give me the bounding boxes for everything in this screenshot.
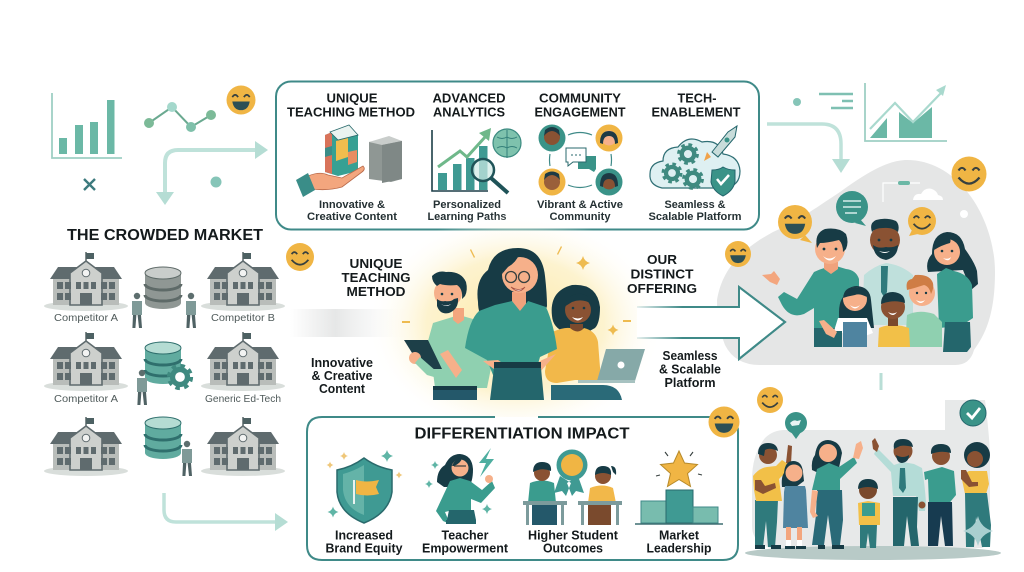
- impact: teacher empowerment: Empowerment: [422, 540, 509, 556]
- icon: teacher with lightning: [425, 448, 495, 524]
- label: generic ed-tech: Generic Ed-Tech: [205, 394, 281, 405]
- ground shadow: [745, 546, 1001, 560]
- impact: student outcomes: Higher Student: [528, 528, 619, 542]
- text: unique teaching method: TEACHING: [342, 270, 410, 285]
- figure: ginger boy: [905, 275, 942, 347]
- competitor school row 1 left: [44, 252, 128, 311]
- figure: man gesturing: [762, 229, 859, 347]
- icon: growth chart with magnifier and brain: [432, 128, 521, 193]
- label: competitor A second: Competitor A: [54, 394, 118, 405]
- icon: gray database with people: [132, 267, 196, 328]
- icon: cloud with gears, rocket and shield: [650, 126, 740, 196]
- pillar: tech-enablement: Scalable Platform: [648, 211, 742, 223]
- background: gray right blob: [717, 160, 995, 365]
- icon: teal location bubble: [785, 412, 807, 439]
- pillar: advanced analytics: Learning Paths: [428, 211, 506, 223]
- figure: central teacher: [465, 248, 557, 400]
- figure: girl in overalls: [819, 286, 874, 347]
- illustration: central team of three: [402, 246, 645, 400]
- icon: bar chart top left: [52, 93, 122, 158]
- icon: top right smile: [952, 156, 986, 192]
- pillar: unique teaching method: Innovative &: [319, 199, 385, 211]
- figure: boy raising hand: [753, 443, 792, 549]
- impact: student outcomes: [523, 450, 622, 556]
- decorative gray band: [290, 309, 420, 337]
- figure: woman teal shirt: [927, 232, 978, 352]
- label: competitor A: Competitor A: [54, 313, 118, 324]
- arrow: distinct offering big arrow: [637, 287, 785, 359]
- icon: laughing speech bubble: [778, 205, 812, 243]
- heading: the crowded market: THE CROWDED MARKET: [67, 227, 263, 244]
- competitor school row 1 right: [201, 252, 285, 311]
- pillar: community engagement: [534, 90, 626, 223]
- icon: x mark: [84, 179, 95, 190]
- figure: girl in blue dress: [782, 461, 808, 549]
- connector: vertical bar: [880, 373, 882, 390]
- impact: student outcomes: Outcomes: [543, 540, 603, 556]
- arrow: curved down to audience: [767, 124, 850, 173]
- heading: differentiation impact: DIFFERENTIATION IMPACT: [414, 426, 630, 442]
- arrow: branching market arrow: [156, 141, 268, 205]
- figure: man with tie: [862, 219, 913, 325]
- pillar: advanced analytics: ANALYTICS: [433, 104, 505, 120]
- figure: man teal shirt: [924, 444, 956, 546]
- icon: teal database with gear: [137, 342, 191, 405]
- impact: brand equity: Increased: [335, 528, 393, 542]
- impact: market leadership: [635, 451, 723, 556]
- impact: teacher empowerment: Teacher: [442, 528, 488, 542]
- icon: top right dot and lines: [793, 94, 853, 108]
- impact: brand equity: Brand Equity: [326, 540, 403, 556]
- icon: community circle with chat: [538, 124, 622, 196]
- pillar: community engagement: Community: [550, 211, 611, 223]
- text: innovative and creative content: & Creative: [312, 369, 373, 383]
- text: seamless and scalable platform: Platform: [664, 376, 716, 390]
- text: unique teaching method: [342, 256, 410, 299]
- pillar: unique teaching method: Creative Content: [307, 211, 397, 223]
- text: unique teaching method: UNIQUE: [350, 256, 403, 271]
- text: our distinct offering: OFFERING: [627, 281, 697, 296]
- impact: market leadership: Market: [659, 528, 700, 542]
- background glow behind team: [367, 213, 663, 437]
- figure: dark boy yellow shirt: [878, 292, 910, 347]
- text: seamless and scalable platform: [659, 349, 721, 390]
- icon: smiling emoji top left: [226, 86, 256, 114]
- figure: woman high five: [810, 440, 863, 549]
- pillar: unique teaching method: TEACHING METHOD: [287, 104, 415, 120]
- text: seamless and scalable platform: Seamless: [662, 349, 718, 363]
- icon: hand holding books: [296, 125, 402, 197]
- pillar: advanced analytics: [428, 90, 521, 223]
- icon: star on podium: [635, 451, 723, 524]
- pillar: tech-enablement: ENABLEMENT: [652, 104, 741, 120]
- pillar: unique teaching method: [287, 90, 415, 223]
- text: our distinct offering: OUR: [647, 252, 678, 267]
- figure: woman clapping: [961, 442, 993, 547]
- icon: students with medal: [523, 450, 622, 525]
- pillar: advanced analytics: Personalized: [433, 199, 501, 211]
- illustration: celebrating crowd: [753, 438, 993, 549]
- text: innovative and creative content: Content: [319, 382, 366, 396]
- pillar: tech-enablement: Seamless &: [664, 199, 726, 211]
- pillar: tech-enablement: TECH-: [678, 90, 716, 106]
- icon: top right growth chart: [865, 83, 947, 141]
- panel: differentiation impact: [307, 406, 740, 560]
- figure: man with tie high five: [872, 438, 926, 546]
- icon: smiling speech bubble: [908, 207, 936, 236]
- pillar: community engagement: Vibrant & Active: [537, 199, 623, 211]
- text: our distinct offering: [627, 252, 697, 296]
- pillar: unique teaching method: UNIQUE: [326, 90, 378, 106]
- icon: line nodes: [144, 102, 216, 132]
- icon: laughing emoji on arrow: [725, 241, 751, 267]
- panel: four pillars: [276, 82, 759, 230]
- text: innovative and creative content: [311, 356, 373, 396]
- pillar: tech-enablement: [648, 90, 742, 223]
- icon: laughing emoji panel corner: [708, 406, 740, 438]
- icon: teal database with person: [145, 417, 192, 476]
- panel: competitor grid: [44, 252, 285, 476]
- background: bottom right blob: [752, 400, 990, 548]
- competitor school row 2 left: [44, 332, 128, 391]
- text: our distinct offering: DISTINCT: [630, 266, 694, 282]
- illustration: families group: [762, 181, 978, 352]
- figure: woman with laptop: [545, 285, 645, 400]
- figure: small boy holding book: [858, 479, 880, 548]
- text: unique teaching method: METHOD: [346, 284, 406, 299]
- arrow: bottom left to impact panel: [164, 493, 288, 531]
- decorative sparkles around team: [402, 246, 631, 336]
- icon: smiling emoji left of heading: [286, 243, 314, 271]
- pillar: advanced analytics: ADVANCED: [432, 90, 506, 106]
- icon: check badge: [960, 400, 986, 426]
- competitor school row 2 right: [201, 332, 285, 391]
- impact: teacher empowerment: [422, 448, 509, 556]
- icon: smile lower right: [757, 387, 783, 413]
- text: seamless and scalable platform: & Scalable: [659, 362, 721, 376]
- impact: market leadership: Leadership: [646, 540, 712, 556]
- label: competitor B: Competitor B: [211, 313, 275, 324]
- decorative dot: [210, 176, 222, 188]
- icon: teal chat bubble: [836, 191, 868, 226]
- scene decor: white cloud and line: [883, 181, 968, 218]
- competitor school row 3 right: [201, 417, 285, 476]
- competitor school row 3 left: [44, 417, 128, 476]
- icon: shield with flag: [326, 450, 402, 523]
- pillar: community engagement: COMMUNITY: [539, 90, 621, 106]
- figure: man with tablet: [404, 272, 492, 400]
- pillar: community engagement: ENGAGEMENT: [534, 104, 626, 120]
- text: innovative and creative content: Innovative: [311, 356, 373, 370]
- impact: brand equity: [326, 450, 403, 556]
